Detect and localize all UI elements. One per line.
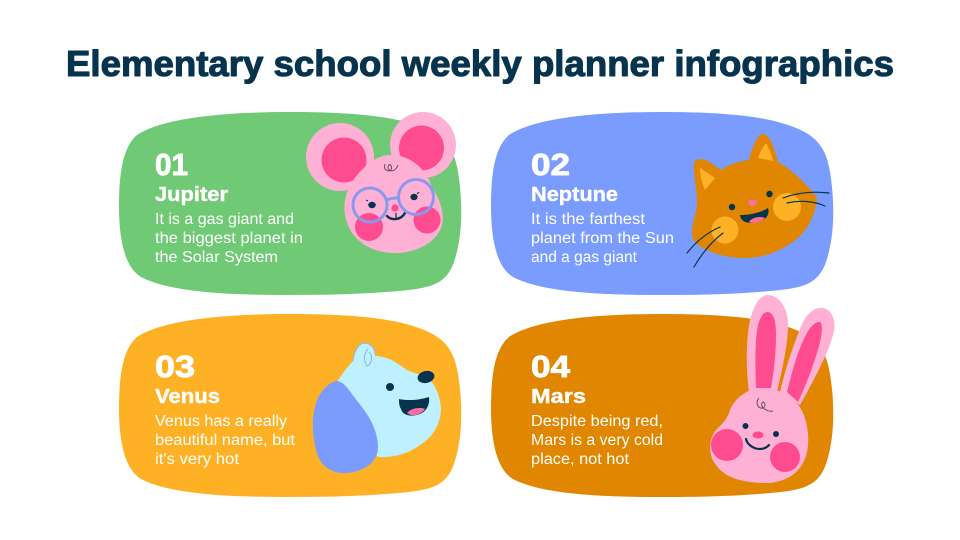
icon: cat	[687, 134, 829, 267]
card background: blue	[491, 112, 833, 295]
card background: yellow	[119, 314, 461, 497]
panel: Mars	[491, 295, 835, 497]
text block: Venus description: beautiful name, but	[155, 432, 296, 449]
heading: Mars: Mars	[531, 386, 586, 408]
text block: Venus description	[155, 413, 296, 468]
number 01: 01	[155, 147, 188, 182]
text block: Jupiter description: the Solar System	[155, 249, 278, 266]
number 02: 02	[531, 147, 570, 182]
panel: Venus	[119, 314, 461, 497]
icon: mouse with glasses	[306, 112, 456, 253]
text block: Jupiter description: It is a gas giant and	[155, 211, 294, 228]
panel: Jupiter	[119, 112, 461, 295]
heading: Venus: Venus	[155, 386, 220, 408]
number 04: 04	[531, 349, 571, 384]
text block: Jupiter description	[155, 211, 303, 266]
text block: Venus description: Venus has a really	[155, 413, 287, 430]
title: Elementary school weekly planner infographics	[66, 43, 894, 84]
heading: Jupiter: Jupiter	[155, 184, 228, 206]
icon: bunny	[710, 295, 835, 483]
number 03: 03	[155, 349, 195, 384]
text block: Mars description: Mars is a very cold	[531, 432, 663, 449]
icon: dog	[313, 343, 441, 473]
text block: Neptune description: It is the farthest	[531, 211, 646, 228]
text block: Neptune description	[531, 211, 674, 266]
text block: Mars description: Despite being red,	[531, 413, 663, 430]
text block: Mars description: place, not hot	[531, 451, 630, 468]
card background: green	[119, 112, 461, 295]
text block: Neptune description: planet from the Sun	[531, 230, 674, 247]
text block: Venus description: it's very hot	[155, 451, 240, 468]
text block: Jupiter description: the biggest planet in	[155, 230, 303, 247]
text block: Mars description	[531, 413, 663, 468]
text block: Neptune description: and a gas giant	[531, 249, 638, 266]
heading: Neptune: Neptune	[531, 184, 618, 206]
panel: Neptune	[491, 112, 833, 295]
card background: orange	[491, 314, 833, 497]
